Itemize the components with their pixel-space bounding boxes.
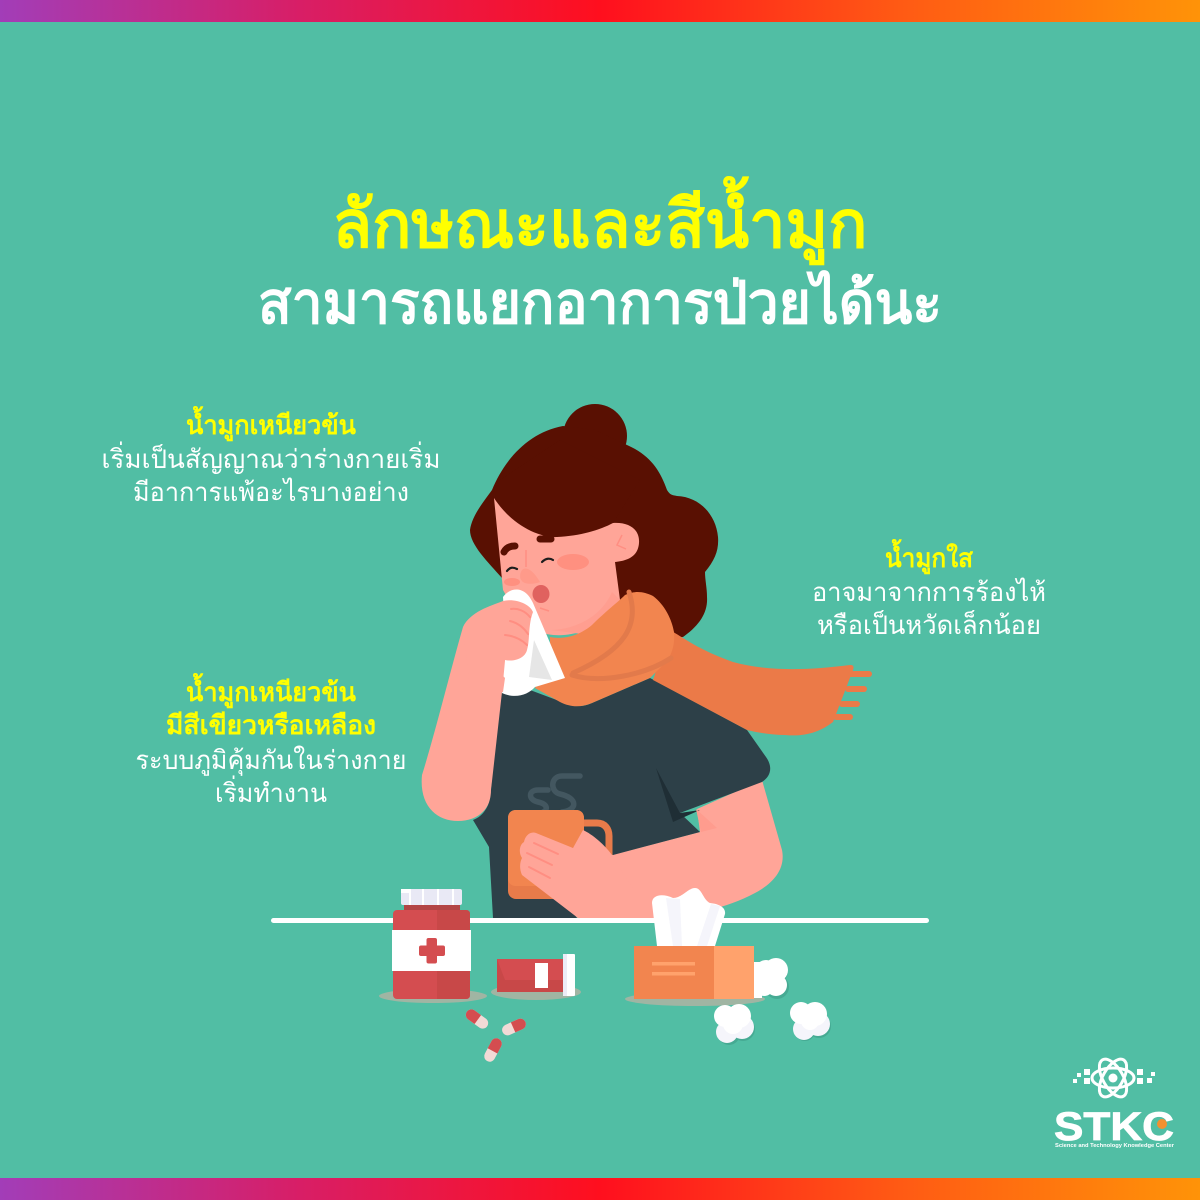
text block: clear mucus: น้ำมูกใส <box>885 538 973 575</box>
tissue sheets <box>652 888 725 946</box>
scarf tail <box>653 630 854 735</box>
left hand <box>463 600 533 692</box>
table line <box>271 918 929 923</box>
text block: green or yellow mucus <box>136 672 406 808</box>
fallen bottle <box>491 954 581 1000</box>
scarf folds <box>572 592 671 679</box>
shirt fold <box>656 768 700 822</box>
illustration: sick woman <box>422 404 869 918</box>
bangs <box>494 440 640 537</box>
nose <box>520 550 540 584</box>
face <box>494 440 640 635</box>
crumpled tissue 1 <box>754 958 789 999</box>
text block: green or yellow mucus: มีสีเขียวหรือเหลือง <box>166 710 376 740</box>
title: สามารถแยกอาการป่วยได้นะ <box>258 270 942 336</box>
text block: green or yellow mucus: น้ำมูกเหนียวข้น <box>186 672 356 709</box>
hair <box>470 404 718 640</box>
bottom gradient bar <box>0 1178 1200 1200</box>
ear line <box>617 535 626 549</box>
mug <box>508 810 609 899</box>
tissue box <box>625 888 765 1006</box>
title <box>258 175 942 336</box>
hand on mug <box>520 809 717 918</box>
crumpled tissue 3 <box>790 1002 831 1041</box>
medicine bottle <box>379 889 487 1003</box>
text block: thick mucus: มีอาการแพ้อะไรบางอย่าง <box>133 477 409 507</box>
pills <box>464 1007 528 1064</box>
text block: thick mucus: น้ำมูกเหนียวข้น <box>186 405 356 442</box>
left arm <box>422 627 510 821</box>
crumpled tissue 2 <box>714 1004 755 1045</box>
title: ลักษณะและสีน้ำมูก <box>332 175 868 266</box>
steam <box>530 776 580 812</box>
logo atom icon <box>1092 1055 1134 1101</box>
pill 2 <box>500 1017 528 1037</box>
text block: thick mucus: เริ่มเป็นสัญญาณว่าร่างกายเริ่ม <box>102 441 440 474</box>
shirt <box>473 678 770 918</box>
tissue in hand <box>502 589 565 696</box>
logo tagline: Science and Technology Knowledge Center <box>1055 1143 1175 1149</box>
right arm <box>520 780 783 918</box>
scarf fringe <box>836 674 869 717</box>
scarf wrap <box>535 592 674 706</box>
pill 1 <box>464 1007 490 1031</box>
mouth <box>532 585 550 603</box>
text block: thick mucus <box>102 405 440 507</box>
logo wordmark: STKC <box>1054 1105 1174 1149</box>
text block: green or yellow mucus: ระบบภูมิคุ้มกันในร่างกาย <box>136 745 406 776</box>
eyes <box>507 568 517 571</box>
logo: STKC <box>1054 1055 1175 1149</box>
top gradient bar <box>0 0 1200 22</box>
text block: clear mucus <box>812 538 1046 640</box>
eyebrows <box>504 546 515 552</box>
pill 3 <box>482 1036 504 1064</box>
text block: clear mucus: หรือเป็นหวัดเล็กน้อย <box>817 609 1041 640</box>
logo dots <box>1073 1069 1155 1084</box>
text block: clear mucus: อาจมาจากการร้องไห้ <box>812 577 1046 607</box>
cheeks <box>557 554 589 570</box>
text block: green or yellow mucus: เริ่มทำงาน <box>215 775 327 808</box>
